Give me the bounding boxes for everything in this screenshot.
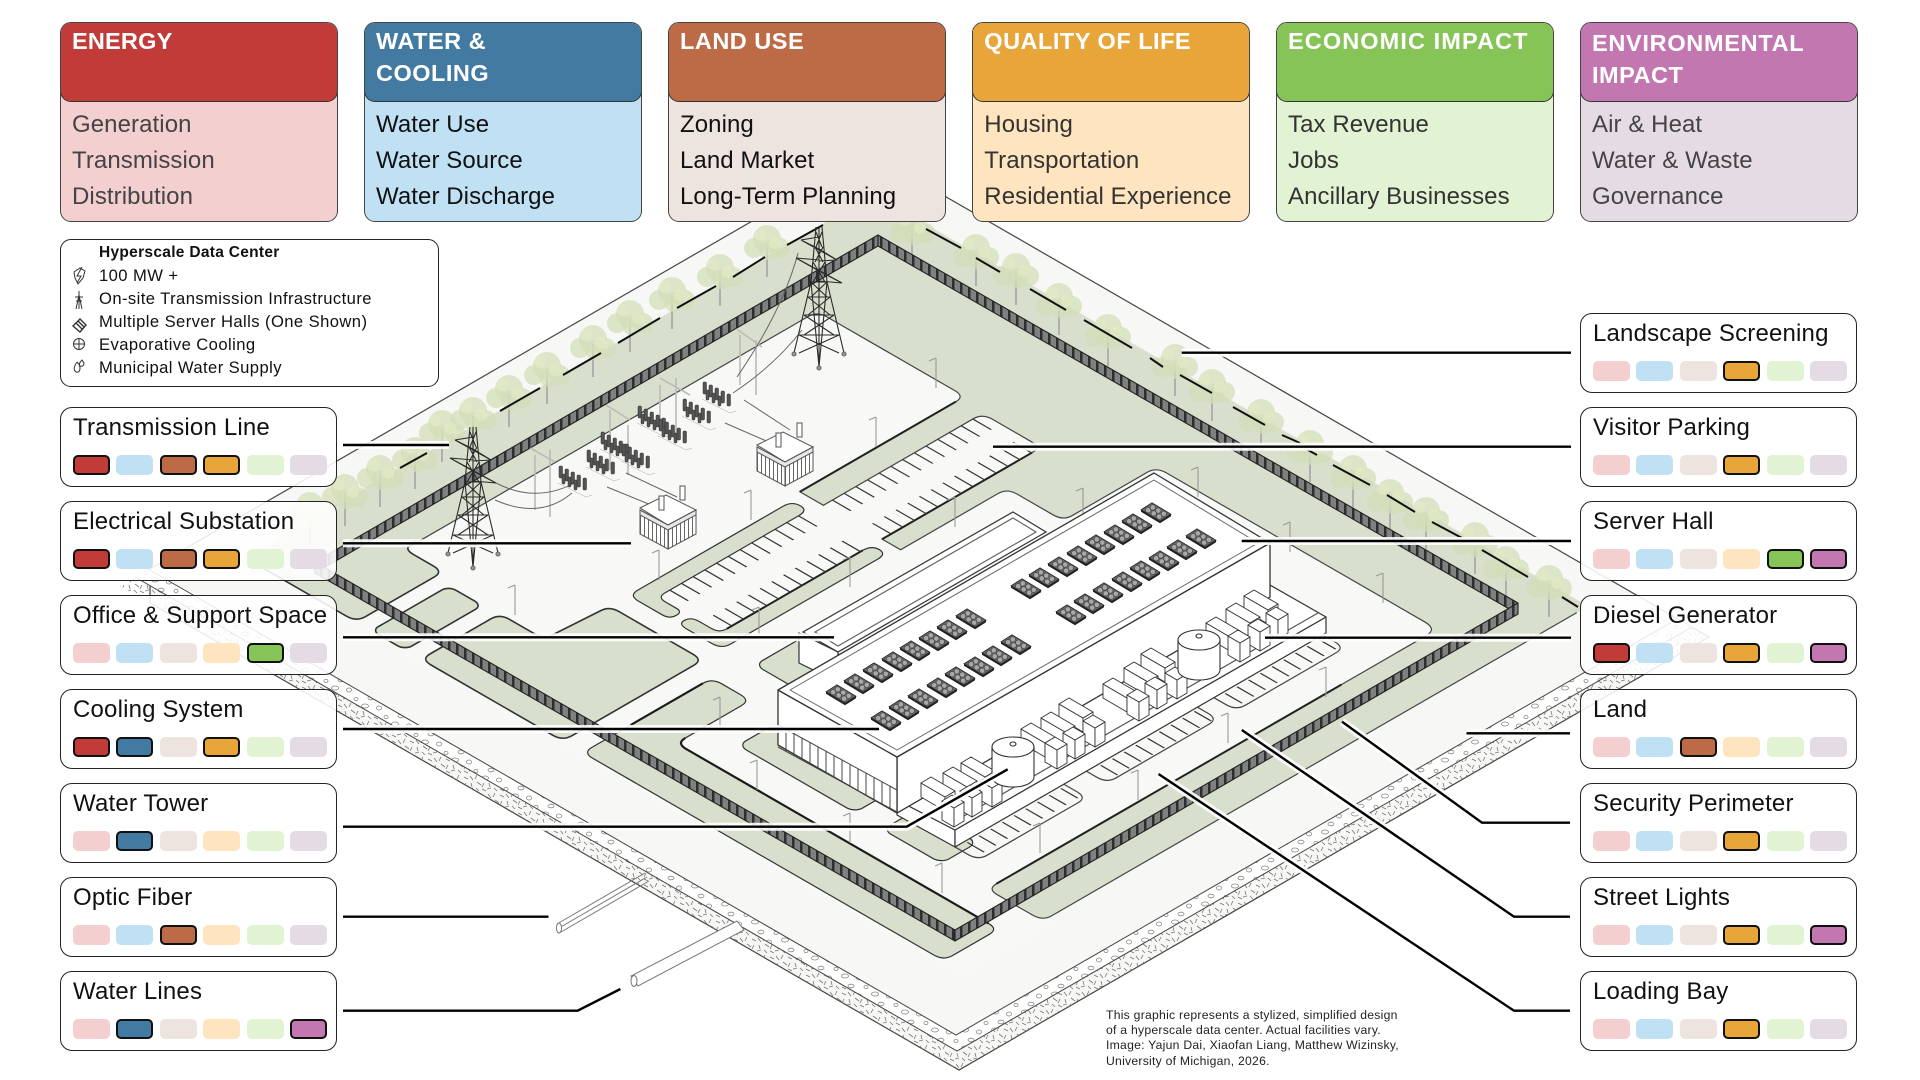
- credit note: Image: Yajun Dai, Xiaofan Liang, Matthew Wizinsky,: [1106, 1038, 1399, 1052]
- label: Diesel Generator: Diesel Generator: [1593, 602, 1777, 629]
- credit note: of a hyperscale data center. Actual facilities vary.: [1106, 1023, 1381, 1037]
- electrical substation: [495, 253, 813, 549]
- category card: Economic Impact: Tax Revenue: [1288, 111, 1429, 138]
- label: Transmission Line: [60, 407, 337, 487]
- category card: Environmental Impact: IMPACT: [1592, 62, 1683, 88]
- land parcel base: [150, 153, 1709, 1070]
- label: Security Perimeter: Security Perimeter: [1593, 790, 1794, 817]
- label: Diesel Generator: [1580, 595, 1857, 675]
- category card: Environmental Impact: Air & Heat: [1592, 111, 1702, 138]
- glazing stripes: [778, 725, 897, 812]
- credit note: This graphic represents a stylized, simplified design: [1106, 1008, 1398, 1022]
- underground water line: [631, 921, 744, 986]
- label: Optic Fiber: Optic Fiber: [73, 884, 192, 911]
- leader lines: [343, 353, 1571, 1011]
- street lights: [508, 358, 1383, 893]
- category card: Environmental Impact: Governance: [1592, 183, 1724, 210]
- category card: Land Use: Zoning: [680, 111, 754, 138]
- rooftop cooling units: [826, 503, 1216, 731]
- label: Cooling System: [60, 689, 337, 769]
- security perimeter fence: [315, 235, 1518, 941]
- category card: Energy: Distribution: [72, 183, 193, 210]
- label: Water Lines: [60, 971, 337, 1051]
- category card: Water & Cooling: Water Use: [376, 111, 489, 138]
- label: Server Hall: [1580, 501, 1857, 581]
- category card: Land Use: Long-Term Planning: [680, 183, 896, 210]
- label: Street Lights: [1580, 877, 1857, 957]
- category card: Energy: Transmission: [72, 147, 215, 174]
- parking stalls: [603, 422, 1346, 851]
- label: Visitor Parking: [1580, 407, 1857, 487]
- insulator clusters: [702, 382, 736, 413]
- landscape screening trees: upper right row: [889, 210, 1578, 617]
- category card: Quality of Life: Transportation: [984, 147, 1139, 174]
- paved area: [313, 291, 1500, 976]
- legend: hyperscale data center: Hyperscale Data Center: [99, 244, 280, 261]
- category card: Water & Cooling: Water Source: [376, 147, 523, 174]
- parking islands: [629, 501, 833, 619]
- category card: Energy: ENERGY: [72, 28, 172, 54]
- green landscape band: [245, 194, 1588, 969]
- label: Water Lines: Water Lines: [73, 978, 202, 1005]
- label: Water Tower: Water Tower: [73, 790, 208, 817]
- diesel generators: [921, 590, 1288, 827]
- label: Visitor Parking: Visitor Parking: [1593, 414, 1750, 441]
- category card: Water & Cooling: WATER &: [376, 28, 486, 54]
- label: Land: [1580, 689, 1857, 769]
- category card: Quality of Life: Residential Experience: [984, 183, 1232, 210]
- yard-side parking lots: [955, 635, 1346, 860]
- category card: Economic Impact: ECONOMIC IMPACT: [1288, 28, 1529, 54]
- label: Loading Bay: Loading Bay: [1593, 978, 1728, 1005]
- ground plan: landscape, pavement and islands: [240, 194, 1596, 976]
- label: Electrical Substation: [60, 501, 337, 581]
- equipment yard: [897, 585, 1326, 847]
- roof: [778, 473, 1270, 757]
- category card: Land Use: [668, 22, 946, 222]
- label: Security Perimeter: [1580, 783, 1857, 863]
- transmission towers: [446, 227, 846, 570]
- water tanks: [992, 630, 1220, 787]
- left wall: [778, 690, 897, 813]
- category card: Land Use: Land Market: [680, 147, 814, 174]
- label: Transmission Line: Transmission Line: [73, 414, 270, 441]
- label: Server Hall: Server Hall: [1593, 508, 1714, 535]
- legend icons: [72, 266, 87, 373]
- wiring: [495, 253, 802, 509]
- category card: Quality of Life: QUALITY OF LIFE: [984, 28, 1191, 54]
- category card: Energy: Generation: [72, 111, 192, 138]
- legend: hyperscale data center: Municipal Water Supply: [99, 358, 282, 377]
- category card: Water & Cooling: [364, 22, 642, 222]
- category card: Water & Cooling: COOLING: [376, 60, 489, 86]
- category card: Environmental Impact: ENVIRONMENTAL: [1592, 30, 1804, 56]
- server hall building: [778, 473, 1270, 813]
- gantry poles: [530, 330, 762, 517]
- gravel cross-section bands: [120, 569, 1709, 1070]
- label: Electrical Substation: Electrical Substation: [73, 508, 294, 535]
- island: long security strip: [583, 678, 1073, 961]
- label: Land: Land: [1593, 696, 1647, 723]
- label: Cooling System: Cooling System: [73, 696, 244, 723]
- label: Landscape Screening: Landscape Screening: [1593, 320, 1829, 347]
- label: Street Lights: Street Lights: [1593, 884, 1730, 911]
- label: Office & Support Space: [60, 595, 337, 675]
- category card: Water & Cooling: Water Discharge: [376, 183, 555, 210]
- right wall: [897, 543, 1270, 813]
- category card: Environmental Impact: Water & Waste: [1592, 147, 1753, 174]
- legend: hyperscale data center: On-site Transmission Infrastructure: [99, 289, 372, 308]
- legend: hyperscale data center: Multiple Server Halls (One Shown): [99, 312, 367, 331]
- low office wing: [799, 512, 1046, 682]
- credit note: [1106, 1008, 1399, 1068]
- legend: hyperscale data center: Evaporative Cooling: [99, 335, 256, 354]
- category card: Quality of Life: Housing: [984, 111, 1073, 138]
- legend: hyperscale data center: [60, 239, 439, 387]
- label: Loading Bay: [1580, 971, 1857, 1051]
- label: Office & Support Space: Office & Support Space: [73, 602, 327, 629]
- category card: Economic Impact: Jobs: [1288, 147, 1339, 174]
- underground optic fiber: [556, 873, 649, 933]
- island: small: [371, 586, 482, 650]
- category card: Quality of Life: [972, 22, 1250, 222]
- legend: hyperscale data center: 100 MW +: [99, 266, 178, 285]
- category card: Economic Impact: [1276, 22, 1554, 222]
- category card: Environmental Impact: [1580, 22, 1858, 222]
- category card: Economic Impact: Ancillary Businesses: [1288, 183, 1510, 210]
- transformers: [757, 423, 813, 486]
- island: large: [421, 578, 703, 741]
- building-side islands: [755, 635, 856, 694]
- credit note: University of Michigan, 2026.: [1106, 1054, 1270, 1068]
- landscape screening trees: upper left row: [287, 225, 823, 544]
- island: corner: [257, 507, 457, 622]
- label: Optic Fiber: [60, 877, 337, 957]
- pavement edges: [402, 243, 1577, 921]
- category card: Land Use: LAND USE: [680, 28, 804, 54]
- label: Landscape Screening: [1580, 313, 1857, 393]
- label: Water Tower: [60, 783, 337, 863]
- category card: Energy: [60, 22, 338, 222]
